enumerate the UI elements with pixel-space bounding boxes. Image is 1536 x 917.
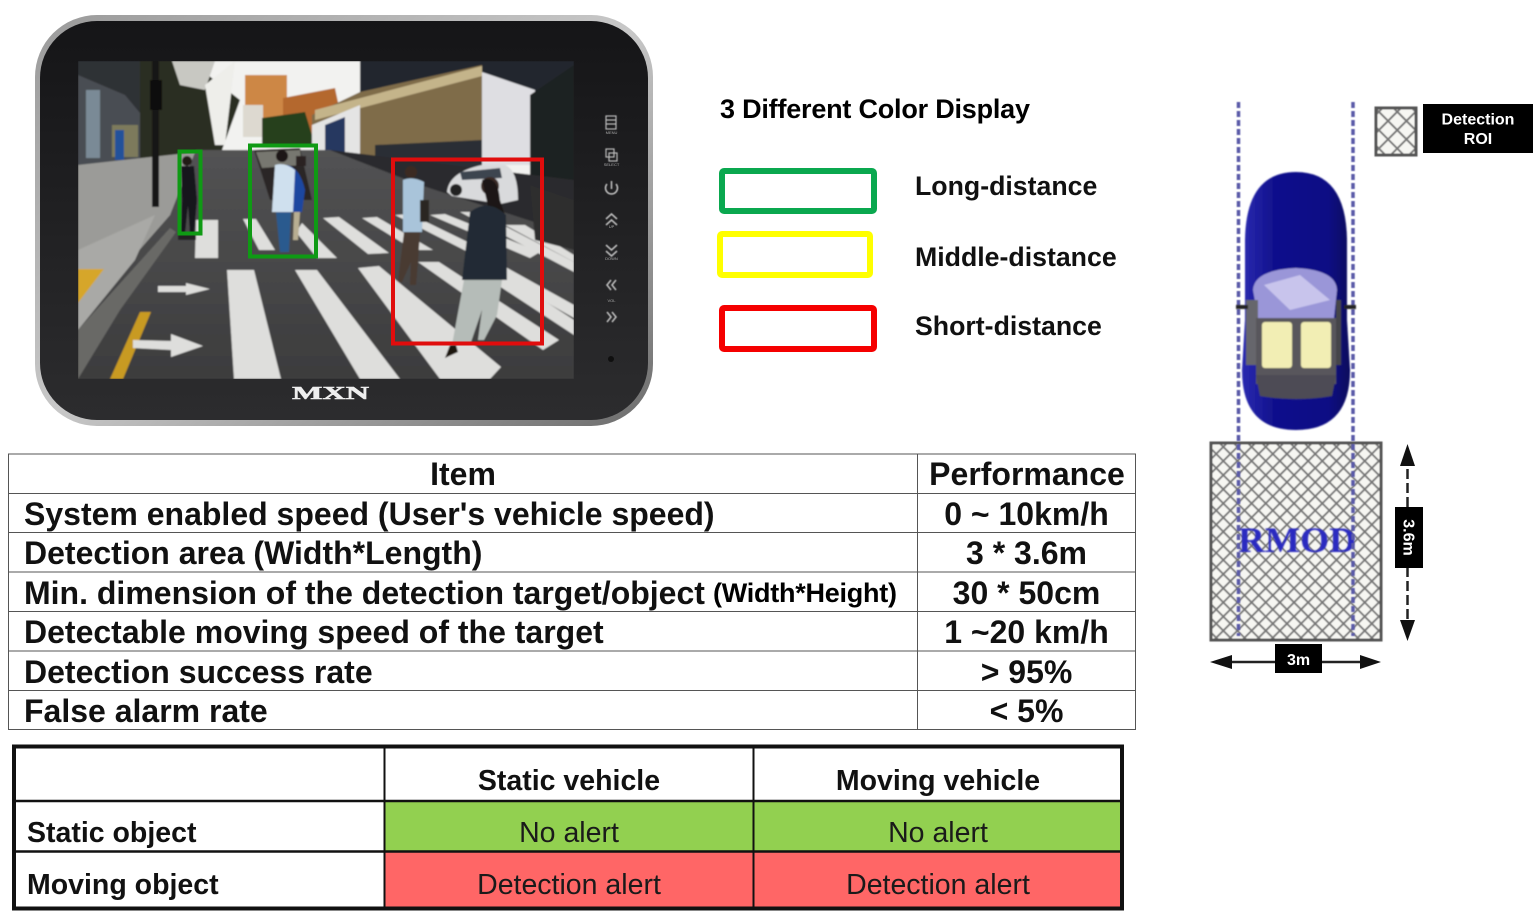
row: moving object: Detection alert [846, 869, 1030, 901]
bounding box: short-distance [393, 160, 542, 344]
row: moving object [27, 869, 1030, 901]
width label [1275, 644, 1322, 673]
monitor side buttons [606, 116, 618, 322]
bounding box: long-distance centre [250, 146, 316, 256]
pedestrian 1 [178, 156, 197, 240]
row: minimum dimension: 30 * 50cm [953, 575, 1100, 611]
monitor device [35, 15, 653, 426]
legend title: 3 Different Color Display [720, 94, 1030, 124]
width arrow [1210, 655, 1381, 669]
button labels: DOWN [605, 256, 618, 261]
row: detection area: Detection area (Width*Length) [24, 535, 482, 571]
column headers: Static vehicle [478, 765, 660, 797]
pedestrian 4 [445, 177, 507, 358]
button labels [604, 130, 620, 303]
button labels: VOL [607, 298, 616, 303]
detection zone diagram [1210, 102, 1533, 673]
table grid [8, 454, 1136, 730]
column headers: Moving vehicle [836, 765, 1040, 797]
legend: long-distance: Long-distance [915, 171, 1097, 201]
row: success rate: > 95% [981, 654, 1072, 690]
table lines [14, 746, 1122, 908]
column headers [478, 765, 1040, 797]
legend: short-distance [722, 308, 1102, 349]
car top view [1236, 172, 1356, 430]
row: minimum dimension [24, 575, 1100, 611]
header row: Item [430, 456, 496, 492]
row: static object: No alert [888, 817, 988, 849]
length label [1395, 507, 1423, 568]
ROI legend swatch [1376, 108, 1416, 155]
ROI legend label: Detection [1442, 112, 1514, 128]
legend: long-distance [722, 171, 1097, 211]
row: false alarm rate [24, 693, 1063, 729]
row: moving object: Moving object [27, 869, 219, 901]
row: success rate [24, 654, 1072, 690]
row: system enabled speed [24, 496, 1109, 532]
button labels: MENU [606, 130, 617, 135]
legend: middle-distance [720, 234, 1117, 275]
row: static object: No alert [519, 817, 619, 849]
ROI legend label: ROI [1464, 131, 1492, 148]
alert logic table [14, 746, 1122, 908]
ROI legend label [1423, 104, 1533, 153]
red detection-alert cells [385, 852, 1122, 907]
row: minimum dimension: (Width*Height) [713, 578, 897, 608]
row: detection area: 3 * 3.6m [966, 535, 1087, 571]
sensor dot [608, 356, 614, 362]
row: false alarm rate: < 5% [990, 693, 1063, 729]
row: false alarm rate: False alarm rate [24, 693, 268, 729]
performance table [8, 454, 1136, 730]
detection ROI hatch area [1211, 443, 1381, 640]
monitor bezel [35, 15, 653, 426]
row: static object: Static object [27, 817, 197, 849]
row: target speed [24, 614, 1109, 650]
pedestrian 3 [398, 166, 429, 285]
row: system enabled speed: System enabled speed (User's vehicle speed) [24, 496, 715, 532]
row: system enabled speed: 0 ~ 10km/h [944, 496, 1109, 532]
brand logo: MXN [292, 383, 369, 403]
row: minimum dimension: Min. dimension of the detection target/object [24, 575, 705, 611]
bounding box: long-distance far left [180, 152, 200, 234]
width label: 3m [1287, 652, 1310, 669]
row: moving object: Detection alert [477, 869, 661, 901]
legend: middle-distance: Middle-distance [915, 242, 1117, 272]
row: target speed: Detectable moving speed of the target [24, 614, 604, 650]
button labels: SELECT [604, 162, 620, 167]
legend [720, 94, 1117, 349]
length arrow [1400, 444, 1415, 641]
row: target speed: 1 ~20 km/h [944, 614, 1109, 650]
RMOD label: RMOD [1238, 520, 1356, 560]
monitor face [40, 21, 648, 420]
row: success rate: Detection success rate [24, 654, 373, 690]
vehicle width dashed lines [1238, 102, 1353, 636]
button labels: UP [609, 224, 615, 229]
row: detection area [24, 535, 1087, 571]
legend: short-distance: Short-distance [915, 311, 1102, 341]
header row [430, 456, 1125, 492]
length label: 3.6m [1400, 519, 1416, 556]
header row: Performance [929, 456, 1125, 492]
pedestrian 2 [272, 150, 306, 252]
row: static object [27, 817, 988, 849]
camera view with pedestrians on a crosswalk [78, 61, 574, 379]
green no-alert cells [385, 802, 1122, 851]
